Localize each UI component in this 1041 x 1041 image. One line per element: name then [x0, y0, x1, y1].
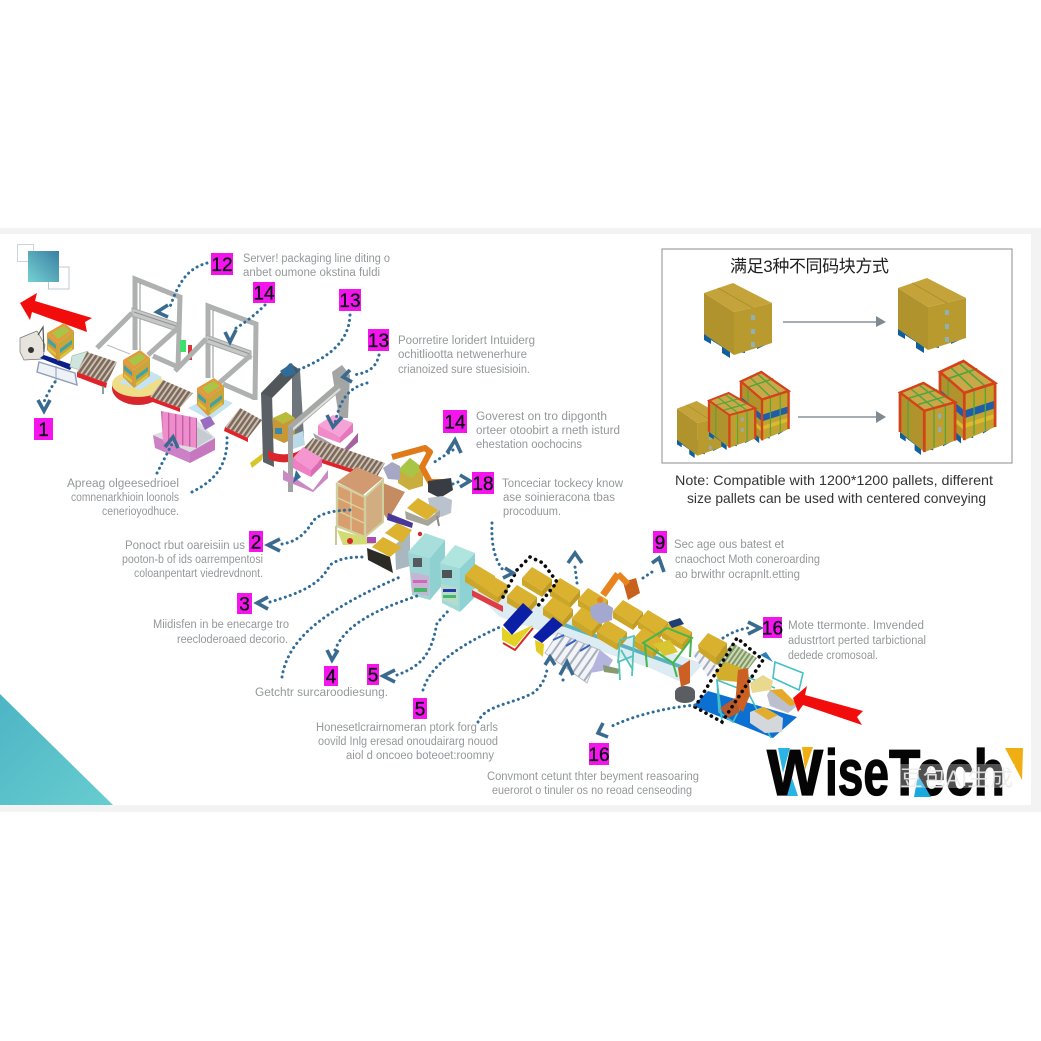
conveyor 2	[150, 380, 193, 412]
panel heading: 满足3种不同码块方式	[730, 257, 889, 276]
callout 14 robot: 14	[444, 412, 466, 434]
callout 12: 12	[211, 255, 233, 276]
pallet: single load after	[898, 278, 966, 353]
callout 5 lower: Honesetlcrairnomeran ptork forg arls	[316, 722, 498, 734]
turntable 1 with pallet load	[112, 350, 164, 405]
callout 5 lower: aiol d oncoeo boteoet:roomny	[346, 750, 494, 762]
pallet: plain small load	[677, 401, 723, 458]
compatibility note	[675, 472, 993, 506]
callout 16 right: 16	[762, 618, 783, 640]
callout 12: anbet oumone okstina fuldi	[243, 267, 380, 279]
WiseTech logo	[767, 736, 1023, 809]
conveyor 4	[300, 438, 385, 481]
callout 16 bottom	[487, 705, 699, 797]
callout 16 bottom: Convmont cetunt thter beyment reasoaring	[487, 771, 699, 783]
callout 12: Server! packaging line diting o	[243, 253, 390, 265]
callout 14 upper	[225, 282, 275, 342]
gantry 3	[290, 365, 350, 492]
WiseTech logo: Tech	[889, 736, 1005, 809]
exit wrapper station	[20, 323, 77, 385]
callout 14 robot: orteer otoobirt a rneth isturd	[476, 425, 620, 437]
callout 9: 9	[655, 533, 665, 554]
callout 1: 1	[38, 420, 49, 441]
callout 18: ase soinieracona tbas	[503, 492, 615, 504]
corner decoration: top-left squares	[18, 244, 69, 289]
pallet: strapped load after	[900, 383, 955, 455]
callout 3: reecloderoaed decorio.	[177, 634, 288, 646]
callout 18: 18	[472, 474, 494, 495]
callout 2: coloanpentart viedrevdnont.	[134, 568, 263, 580]
callout 16 right	[723, 617, 926, 662]
green machine frame	[643, 618, 692, 677]
turntable 2 with pallet load	[188, 378, 233, 430]
pallet: strapped double tier after	[940, 361, 995, 444]
callout 14 upper: 14	[253, 284, 275, 304]
incoming red arrow	[793, 686, 863, 725]
callout 18	[450, 472, 624, 518]
machine: gantry 1	[97, 279, 192, 368]
callout 2: Ponoct rbut oareisiin us	[125, 540, 245, 552]
page frame band	[0, 228, 1041, 812]
callout 13 gantry: 13	[368, 331, 389, 352]
callout 3	[153, 557, 365, 646]
teal frame	[618, 636, 634, 680]
callout 18: procoduum.	[503, 506, 561, 518]
callout 2: pooton-b of ids oarrempentosi	[122, 554, 263, 566]
main white panel	[0, 234, 1031, 805]
callout 5 left: 5	[368, 666, 378, 686]
control cabinet 2	[440, 545, 475, 612]
callout 13 gantry: ochitliootta netwenerhure	[398, 349, 527, 361]
callout 13 gantry: Poorretire loridert Intuiderg	[398, 335, 535, 347]
callout 13 gantry	[327, 329, 535, 427]
arrow into highlight region 1	[492, 523, 513, 578]
callout 4: 4	[326, 667, 337, 688]
callout carton magazines: comnenarkhioin loonols	[71, 492, 179, 504]
outgoing red arrow	[20, 293, 92, 332]
blue top machine 1	[502, 603, 533, 650]
incoming line frames and machines	[717, 652, 803, 738]
pink carton magazine 3	[283, 447, 328, 492]
callout 4: Getchtr surcaroodiesung.	[255, 687, 388, 699]
end robot on round base	[675, 660, 695, 703]
callout 13 tower	[298, 289, 361, 370]
callout 9: cnaochoct Moth coneroarding	[675, 554, 820, 566]
WiseTech logo: W	[767, 736, 824, 809]
compatibility note: Note: Compatible with 1200*1200 pallets, different	[675, 472, 993, 488]
callout 1	[34, 382, 55, 441]
callout 16 bottom: euerorot o tinuler os no reoad censeoding	[492, 785, 692, 797]
pink carton magazine 1	[153, 411, 215, 463]
callout 9: Sec age ous batest et	[674, 539, 785, 551]
callout 5 left	[367, 609, 450, 686]
feeding stations and yellow cartons	[367, 498, 440, 573]
callout 3: Miidisfen in be enecarge tro	[153, 619, 289, 631]
callout 14 robot	[433, 410, 620, 463]
callout 18: Tonceciar tockecy know	[502, 478, 624, 490]
yellow cartons on main line	[465, 564, 668, 658]
callout carton magazines	[67, 437, 227, 518]
callout 13 tower: 13	[339, 291, 361, 312]
callout 16 bottom: 16	[588, 745, 610, 766]
pallet: single load before	[704, 283, 772, 358]
blue floor plate	[693, 691, 797, 738]
panel: stacking modes	[662, 249, 1012, 463]
callout 13 gantry: crianoized sure stuesisioin.	[398, 364, 530, 376]
tall carton tower	[336, 467, 405, 545]
pink carton magazine 2	[313, 415, 358, 453]
callout 14 robot: Goverest on tro dipgonth	[476, 411, 607, 423]
callout 2	[122, 510, 353, 580]
callout carton magazines: Apreag olgeesedrioel	[67, 478, 179, 490]
inlet conveyor	[692, 633, 757, 682]
robot cell 2	[590, 574, 640, 624]
conveyor 1	[70, 351, 117, 394]
arrow: row 2	[798, 411, 886, 423]
WiseTech logo: ise	[825, 736, 889, 809]
callout 16 right: adustrtort perted tarbictional	[788, 635, 926, 647]
callout carton magazines: cenerioyodhuce.	[102, 506, 179, 518]
callout 16 right: Mote ttermonte. Imvended	[788, 620, 924, 632]
pallet: strapped load	[709, 393, 755, 450]
up arrow to carton line	[568, 553, 582, 583]
corner decoration: bottom-left teal triangle	[0, 694, 113, 805]
long box conveyor	[472, 584, 703, 684]
callout 14 robot: ehestation oochocins	[476, 439, 582, 451]
arrow: row 1	[783, 316, 886, 327]
callout 3: 3	[239, 594, 250, 616]
stretch wrapper tower	[250, 363, 305, 468]
pallet: strapped double tier	[741, 372, 789, 443]
callout 4	[255, 577, 417, 699]
callout 2: 2	[251, 532, 261, 554]
callout 5 lower: oovild Inlg eresad onoudairarg nouod	[318, 736, 498, 748]
dotted arrows to rack	[478, 657, 573, 722]
blue top machine 2 and white rack	[533, 617, 620, 683]
control cabinet 1	[408, 533, 445, 600]
WiseTech logo: 豆包AI生成	[900, 766, 1013, 791]
robot cell 1	[383, 448, 453, 517]
callout 9	[643, 531, 820, 581]
conveyor 3	[224, 408, 262, 442]
machine: gantry 2	[175, 306, 256, 400]
dotted highlight region 2	[695, 638, 763, 722]
callout 9: ao brwithr ocrapnlt.etting	[675, 569, 800, 581]
callout 5 lower: 5	[415, 700, 425, 720]
callout 16 right: dedede cromosoal.	[788, 650, 878, 662]
compatibility note: size pallets can be used with centered conveying	[687, 490, 986, 506]
dotted highlight region 1	[503, 557, 557, 607]
callout 5 lower	[316, 627, 500, 762]
callout 12	[157, 253, 390, 317]
